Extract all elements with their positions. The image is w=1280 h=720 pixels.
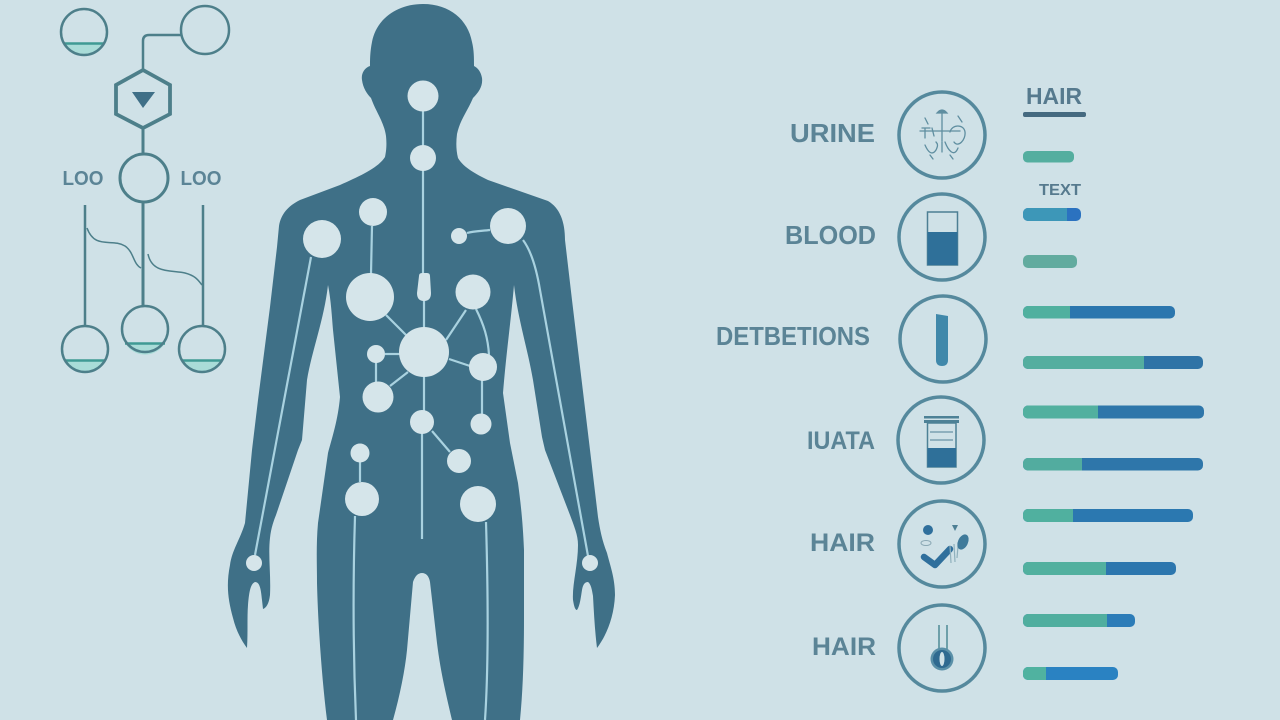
icon: top left flask node (61, 9, 107, 55)
icon: labelled jar (898, 397, 984, 483)
bar 2 (1023, 208, 1081, 221)
bar 9 (1023, 562, 1176, 575)
panel: human body figure (228, 4, 615, 720)
icon: blood beaker (899, 194, 985, 280)
label: IUATA: IUATA (807, 427, 875, 455)
bar 5 (1023, 356, 1203, 369)
icon: top right node (181, 6, 229, 54)
body network connector lines (255, 110, 588, 720)
connector lines to lower nodes (85, 202, 203, 326)
connector: hexagon to middle node (142, 128, 144, 155)
icon: hexagon with triangle (116, 70, 170, 128)
label: right LOO: LOO (180, 168, 222, 190)
icon: test tube (900, 296, 986, 382)
body silhouette (228, 4, 615, 720)
label: DETBETIONS: DETBETIONS (716, 321, 870, 351)
icon: middle node (120, 154, 168, 202)
panel: bar chart (1023, 83, 1204, 680)
label: HAIR row five: HAIR (810, 529, 875, 557)
bar 7 (1023, 458, 1203, 470)
icon: urine body organs (899, 92, 985, 178)
body node circles (246, 80, 598, 571)
icon: hair check mark (899, 501, 985, 587)
icon: hair follicle (899, 605, 985, 691)
panel: sample type labels and icons (716, 92, 986, 691)
label: left LOO: LOO (62, 168, 104, 190)
label: BLOOD: BLOOD (785, 220, 876, 250)
bar 8 (1023, 509, 1193, 522)
panel: process flow diagram (61, 6, 229, 372)
icon: lower left flask node (62, 326, 108, 372)
icon: lower centre flask node (122, 306, 168, 355)
bar 6 (1023, 406, 1204, 418)
bar 10 (1023, 614, 1135, 627)
chart heading: HAIR: HAIR (1026, 83, 1082, 109)
heading underline (1023, 112, 1086, 117)
label: URINE: URINE (790, 118, 875, 148)
icon: lower right flask node (179, 326, 225, 372)
connector: top node to hexagon (143, 35, 181, 70)
bar 3 (1023, 255, 1077, 268)
bar 11 (1023, 667, 1118, 680)
bar 4 (1023, 306, 1175, 318)
chart label: TEXT: TEXT (1039, 182, 1081, 199)
label: HAIR row six: HAIR (812, 633, 876, 661)
bar 1 (1023, 151, 1074, 162)
